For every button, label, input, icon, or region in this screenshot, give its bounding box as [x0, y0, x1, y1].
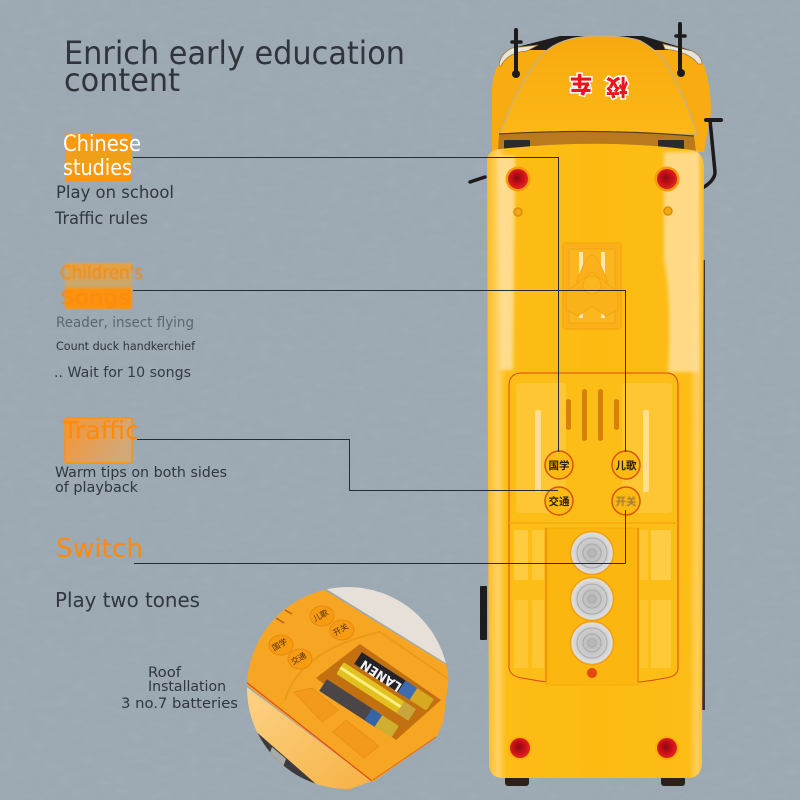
inset panel line [285, 632, 450, 700]
body reflections [498, 152, 699, 372]
battery LANEN: LANEN [358, 656, 405, 694]
heading: Traffic [62, 416, 139, 445]
side ribs [535, 410, 649, 492]
inset vents [276, 610, 292, 623]
text: Children's songs items: Reader, insect flying [56, 315, 194, 331]
school bus illustration [470, 24, 721, 786]
inset bus side [247, 687, 372, 789]
heading [63, 132, 141, 181]
title: Enrich early education [64, 34, 405, 72]
text: battery note: Installation [148, 679, 226, 695]
highlight box [65, 134, 132, 181]
hood lettering: 车 [570, 69, 592, 101]
connector lines [133, 158, 626, 564]
bus body [487, 144, 704, 778]
title: content [64, 61, 180, 99]
inset button labels [272, 610, 349, 666]
bus left tail [480, 586, 487, 640]
inset lower tiles [294, 688, 379, 758]
label: Traffic [62, 416, 139, 463]
battery dark [319, 679, 399, 738]
rear lights [506, 166, 680, 760]
panel buttons: 开关 [616, 494, 637, 509]
title [64, 34, 405, 99]
speaker discs [570, 532, 614, 664]
bus headlights [499, 44, 702, 66]
text: battery note: 3 no.7 batteries [121, 696, 238, 712]
text: Traffic items: Warm tips on both sides [55, 465, 227, 481]
label: Children's songs [60, 262, 143, 309]
inset button labels: 开关 [331, 621, 350, 639]
battery gold [336, 662, 416, 721]
screw [586, 668, 598, 678]
hood lettering: 校 [606, 72, 628, 104]
roof hatch [563, 243, 621, 329]
highlight box [65, 418, 132, 463]
bus roof panel [500, 36, 697, 134]
hood lettering [570, 69, 628, 104]
small screws [514, 207, 672, 216]
heading: studies [63, 156, 132, 181]
text: Children's songs items: .. Wait for 10 songs [54, 365, 191, 381]
battery inset photo [247, 587, 449, 789]
right edge dark [702, 260, 705, 710]
inset bus shell [240, 589, 450, 782]
battery LANEN [353, 652, 434, 712]
panel shading [514, 383, 672, 668]
text: Traffic items: of playback [55, 480, 139, 496]
heading: Children's [60, 262, 143, 284]
panel buttons [545, 451, 640, 515]
heading: Switch: Switch [56, 534, 143, 564]
inset button labels: 儿歌 [311, 607, 330, 625]
panel buttons: 儿歌 [616, 458, 637, 473]
wheels [505, 776, 685, 786]
text: battery note: Roof [148, 665, 182, 681]
windshield strip [498, 131, 696, 152]
text: Children's songs items: Count duck handkerchief [56, 339, 196, 353]
inset windows [258, 732, 316, 784]
inset button labels: 交通 [289, 650, 308, 668]
text: Chinese studies items: Traffic rules [54, 209, 148, 229]
panel buttons: 国学 [548, 458, 570, 473]
text: Chinese studies items: Play on school [56, 183, 174, 203]
inset buttons [269, 606, 354, 669]
panel buttons: 交通 [548, 494, 570, 509]
text: Play two tones: Play two tones [55, 588, 200, 612]
text: Chinese studies items [54, 183, 174, 229]
speaker slots [566, 389, 619, 441]
bus rear black edge [513, 36, 690, 60]
bus mirrors and antennas [470, 24, 721, 187]
bus cab shell [492, 50, 711, 152]
inset compartment [316, 644, 441, 740]
inset button labels: 国学 [270, 636, 289, 654]
label: Chinese studies [63, 132, 141, 181]
text: Children's songs items [54, 315, 196, 381]
text: Traffic items [55, 465, 227, 496]
battery and control panel [509, 373, 678, 685]
heading [60, 262, 143, 309]
heading: Songs [60, 287, 130, 309]
highlight box [65, 263, 132, 309]
centre strip [546, 528, 638, 685]
text: battery note [121, 665, 238, 712]
inset backdrop [327, 587, 446, 664]
heading: Chinese [63, 132, 141, 157]
